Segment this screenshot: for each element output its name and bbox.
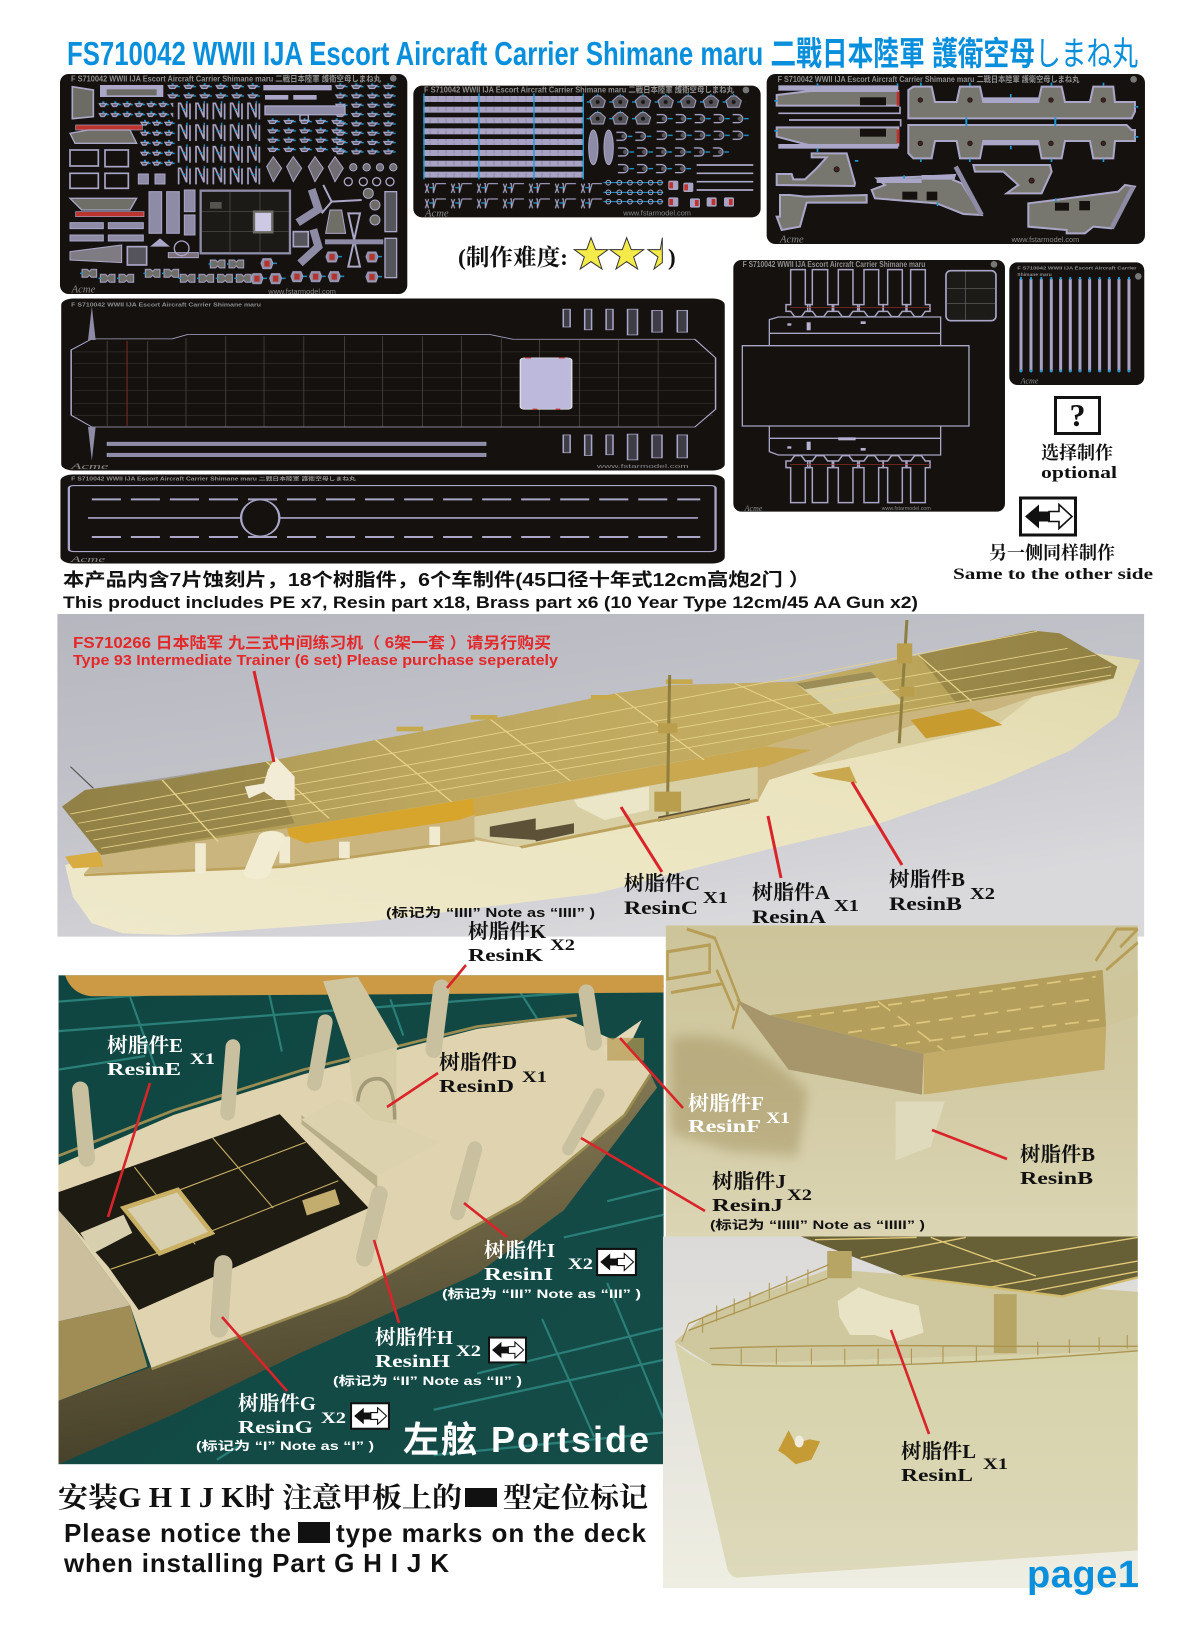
arrow: trainer (254, 671, 274, 762)
label: resin D: ResinD (439, 1076, 514, 1096)
instruction text (58, 1481, 648, 1578)
label: resin G (196, 1392, 374, 1453)
panel: PE deck sheet E (61, 299, 725, 471)
arrow: resin C (621, 807, 662, 872)
label: resin F: 树脂件F (688, 1092, 764, 1115)
crane and base (301, 1115, 377, 1188)
deck surface (675, 1269, 1138, 1364)
black PE deck patch (59, 1114, 369, 1310)
supports (827, 1251, 1017, 1353)
label: resin H: ResinH (375, 1351, 450, 1371)
label: resin B close-up: 树脂件B (1020, 1143, 1095, 1166)
note: trainer purchase text: FS710266 日本陆军 九三式中间练习机（ 6架一套 ）请另行购买 (73, 633, 551, 652)
arrow: resin F (620, 1038, 683, 1108)
label: resin C: ResinC (624, 898, 698, 919)
page number: page1 (1027, 1554, 1139, 1596)
panel: PE sheet B: Acme (424, 209, 449, 220)
panel: PE sheet D: F S710042 WWII IJA Escort Aircraft Carrier Shimane maru (743, 260, 925, 269)
instruction text: when installing Part G H I J K (63, 1548, 449, 1578)
label: resin A: 树脂件A (752, 881, 831, 904)
panel: PE sheet G (60, 474, 725, 564)
label: resin D: 树脂件D (439, 1051, 517, 1074)
panel: PE sheet B: www.fstarmodel.com (622, 208, 691, 217)
hull side (59, 1074, 657, 1464)
instruction text: 安装G H I J K时 注意甲板上的 (58, 1481, 462, 1514)
icon: resin I both sides arrow (597, 1249, 636, 1275)
label: resin K: ResinK (468, 945, 543, 965)
note: trainer purchase text (73, 633, 559, 669)
label: resin L: ResinL (901, 1465, 973, 1485)
label: resin C (624, 872, 728, 919)
arrow: resin A (768, 816, 781, 878)
label: resin I: ResinI (484, 1264, 553, 1284)
arrow: resin I (464, 1203, 507, 1237)
label: resin E: X1 (190, 1051, 215, 1068)
arrow: resin K (447, 965, 466, 988)
label: resin E: 树脂件E (107, 1034, 183, 1057)
optional caption: 选择制作 (1041, 442, 1113, 463)
label: resin F: X1 (766, 1110, 790, 1127)
orange mat edge (59, 975, 664, 996)
label: resin A: ResinA (752, 907, 826, 928)
panel: PE sheet D (733, 260, 1005, 513)
panel: PE sheet D: Acme (744, 504, 763, 513)
panel: PE deck sheet E: www.fstarmodel.com (596, 464, 689, 469)
same-side caption: 另一侧同样制作 (989, 542, 1115, 563)
shadow and support (671, 1036, 808, 1156)
label: resin J (710, 1170, 925, 1232)
label: resin A (752, 881, 859, 928)
label: resin I: X2 (568, 1256, 593, 1273)
panel: PE deck sheet E: F S710042 WWII IJA Escort Aircraft Carrier Shimane maru (71, 301, 261, 308)
label: resin B close-up: ResinB (1020, 1168, 1093, 1188)
label: resin K: 树脂件K (468, 920, 546, 943)
difficulty rating (458, 238, 676, 270)
panel: PE sheet B (413, 85, 761, 220)
arrow: resin G (222, 1317, 287, 1391)
photo: platform close-up (666, 925, 1138, 1237)
label: resin H (333, 1326, 522, 1388)
label: resin L (901, 1440, 1008, 1485)
optional caption (1041, 442, 1117, 482)
arrow: resin E (108, 1083, 150, 1217)
label: resin H: 树脂件H (375, 1326, 453, 1349)
icon: resin H both sides arrow (489, 1338, 526, 1362)
label: resin J: (标记为 “IIIII” Note as “IIIII” ) (710, 1217, 925, 1232)
label: resin B close-up (1020, 1143, 1095, 1188)
panel: PE sheet C (767, 74, 1145, 246)
label: resin I: 树脂件I (484, 1239, 555, 1262)
panel: PE sheet A: Acme (71, 285, 96, 296)
label: portside: 左舷 Portside (403, 1419, 649, 1460)
hull (675, 1342, 1138, 1578)
arrow: resin H (374, 1240, 399, 1323)
product contents text: This product includes PE x7, Resin part x18, Brass part x6 (10 Year Type 12cm/45 AA Gun x2) (63, 593, 918, 612)
hull (65, 650, 1140, 935)
under-deck structures (84, 678, 1114, 873)
difficulty rating: (制作难度: (458, 244, 568, 270)
left block (59, 1210, 130, 1321)
label: resin G: 树脂件G (238, 1392, 316, 1415)
label: resin C: 树脂件C (624, 872, 700, 895)
same-side caption: Same to the other side (953, 566, 1153, 583)
panel: PE sheet F: F S710042 WWII IJA Escort Aircraft Carrier (1017, 266, 1137, 272)
railings (682, 1265, 1138, 1366)
posts (80, 988, 599, 1328)
label: resin K (468, 920, 575, 965)
label: resin A: X1 (834, 896, 859, 915)
panel: PE sheet D: www.fstarmodel.com (882, 506, 931, 512)
difficulty rating: ) (668, 245, 676, 270)
panel: PE sheet F: Acme (1020, 377, 1039, 386)
arrow: resin L (891, 1330, 929, 1434)
panel: PE sheet G: Acme (70, 555, 106, 564)
label: resin B (889, 868, 995, 915)
arrow: resin D (387, 1073, 438, 1107)
panel: PE sheet A: www.fstarmodel.com (267, 287, 336, 296)
label: resin L: 树脂件L (901, 1440, 976, 1463)
label: resin H: X2 (456, 1343, 481, 1360)
label: resin B: 树脂件B (889, 868, 965, 891)
note: trainer purchase text: Type 93 Intermediate Trainer (6 set) Please purchase seperately (73, 652, 559, 669)
photo: full ship (57, 614, 1144, 937)
label: resin E: ResinE (107, 1059, 181, 1079)
instruction text: Please notice the (64, 1518, 291, 1548)
label: resin I: (标记为 “III” Note as “III” ) (442, 1286, 641, 1301)
panel: PE deck sheet E: Acme (70, 461, 109, 471)
label: resin F (688, 1092, 790, 1136)
platform side faces (736, 999, 924, 1095)
anchor fitting (778, 1430, 820, 1464)
label: resin J: 树脂件J (712, 1170, 786, 1193)
product contents text (63, 569, 918, 612)
optional caption: optional (1041, 463, 1117, 482)
instruction text: type marks on the deck (336, 1518, 647, 1548)
panel: PE sheet C: F S710042 WWII IJA Escort Aircraft Carrier Shimane maru 二戰日本陸軍 護衛空母しまね丸 (778, 74, 1079, 84)
icon: optional question box: ? (1070, 397, 1086, 433)
label: resin J: ResinJ (712, 1195, 783, 1215)
arrow: resin B (852, 782, 902, 865)
panel: PE sheet F (1009, 262, 1144, 386)
label: resin G: X2 (321, 1410, 346, 1427)
icon: optional question box (1056, 397, 1100, 434)
arrow: resin B close-up (932, 1130, 1007, 1159)
label: resin H: (标记为 “II” Note as “II” ) (333, 1373, 522, 1388)
label: resin G: (标记为 “I” Note as “I” ) (196, 1438, 374, 1453)
panel: PE sheet A: F S710042 WWII IJA Escort Aircraft Carrier Shimane maru 二戰日本陸軍 護衛空母しまね丸 (71, 74, 381, 84)
panel: PE sheet A (60, 74, 407, 296)
same-side caption (953, 542, 1153, 583)
panel: PE sheet G: F S710042 WWII IJA Escort Aircraft Carrier Shimane maru 二戰日本陸軍 護衛空母しまね丸 (71, 475, 356, 482)
label: resin B: X2 (970, 884, 995, 903)
label: resin G: ResinG (238, 1417, 313, 1437)
label: resin I (442, 1239, 641, 1301)
photo: portside deck on cutting mat (59, 975, 664, 1464)
label: resin C: X1 (703, 888, 728, 907)
label: resin K: X2 (550, 937, 575, 954)
instruction text: 型定位标记 (503, 1482, 648, 1514)
arrow: resin J (581, 1138, 705, 1211)
panel: PE sheet C: Acme (779, 235, 804, 246)
label: resin D: X1 (522, 1069, 547, 1086)
icon: resin G both sides arrow (351, 1403, 389, 1429)
deck (59, 1018, 651, 1369)
platform top (769, 970, 1106, 1054)
deck (62, 631, 1117, 855)
label: resin E (107, 1034, 215, 1079)
label: resin J: X2 (787, 1187, 812, 1204)
label: note IIII: (标记为 “IIII” Note as “IIII” ) (386, 905, 595, 920)
label: resin F: ResinF (688, 1116, 761, 1136)
product contents text: 本产品内含7片蚀刻片，18个树脂件，6个车制件(45口径十年式12cm高炮2门 ） (63, 569, 810, 590)
panel: PE sheet F: Shimane maru (1017, 272, 1052, 278)
overhead deck (801, 1237, 1138, 1296)
panel: PE sheet C: www.fstarmodel.com (1011, 235, 1079, 244)
icon: both sides arrow (1020, 498, 1076, 535)
railings (668, 929, 1138, 1029)
label: resin L: X1 (983, 1456, 1008, 1473)
panel: PE sheet B: F S710042 WWII IJA Escort Aircraft Carrier Shimane maru 二戰日本陸軍 護衛空母しまね丸 (424, 85, 734, 95)
label: resin B: ResinB (889, 894, 962, 915)
label: resin D (439, 1051, 547, 1096)
photo: bow close-up (663, 1237, 1138, 1588)
cross-shaped resin block (838, 1287, 924, 1342)
